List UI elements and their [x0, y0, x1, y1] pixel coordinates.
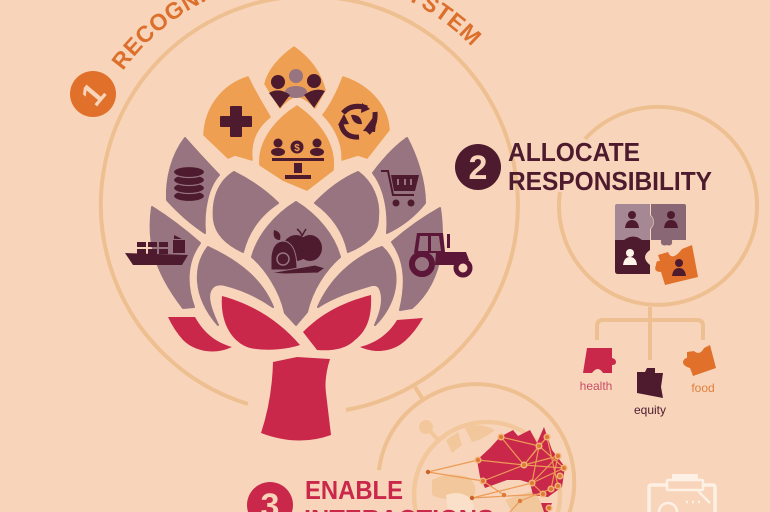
heading: enable interactions: [304, 475, 494, 512]
crimson lower petals: [168, 295, 423, 351]
puzzle of four people: [615, 204, 698, 285]
puzzle: health: health: [580, 379, 612, 393]
ring 3 and link: [379, 384, 574, 512]
network nodes: [426, 434, 567, 511]
connector tree: [597, 307, 703, 360]
icon: shopping cart: [381, 171, 419, 206]
ring 2: [559, 107, 757, 305]
heading: allocate responsibility: RESPONSIBILITY: [508, 166, 712, 196]
icon: table with people and money: $: [294, 143, 300, 154]
icon: cargo ship: [125, 235, 188, 265]
puzzle: health: [580, 348, 616, 393]
icon: tractor: [412, 233, 470, 275]
artichoke diagram: [150, 47, 442, 441]
icon: table with people and money: [271, 138, 324, 179]
number badge 3: [247, 482, 293, 512]
map of Australia: [477, 427, 565, 512]
heading: enable interactions: ENABLE: [305, 475, 403, 505]
globe: [414, 420, 560, 512]
network lines: [428, 437, 564, 512]
icon: medical cross: [220, 106, 252, 137]
heading: allocate responsibility: [508, 137, 712, 196]
number badge 1: [70, 71, 116, 117]
section 1: recognise the system ring: [70, 0, 520, 412]
puzzle: food: [683, 345, 716, 395]
number badge 2: 2: [469, 149, 487, 187]
orange upper petals: [204, 47, 389, 190]
section 2: allocate responsibility: [455, 107, 757, 417]
number badge 1: 1: [73, 76, 113, 112]
heading: allocate responsibility: ALLOCATE: [508, 137, 640, 167]
puzzle: equity: equity: [634, 403, 666, 417]
icon: coin stack: [174, 166, 204, 202]
icon: apple, squash and carrot: [270, 229, 325, 274]
puzzle: food: food: [691, 381, 715, 395]
crimson stem: [261, 357, 331, 441]
icon: clipboard: [649, 474, 715, 512]
mauve middle petals: [150, 138, 442, 325]
icon: people: [269, 69, 325, 108]
icon: recycling leaf: [338, 103, 377, 137]
puzzle: equity: [634, 368, 666, 417]
number badge 2: [455, 144, 501, 190]
section 3: enable interactions: [247, 384, 574, 512]
